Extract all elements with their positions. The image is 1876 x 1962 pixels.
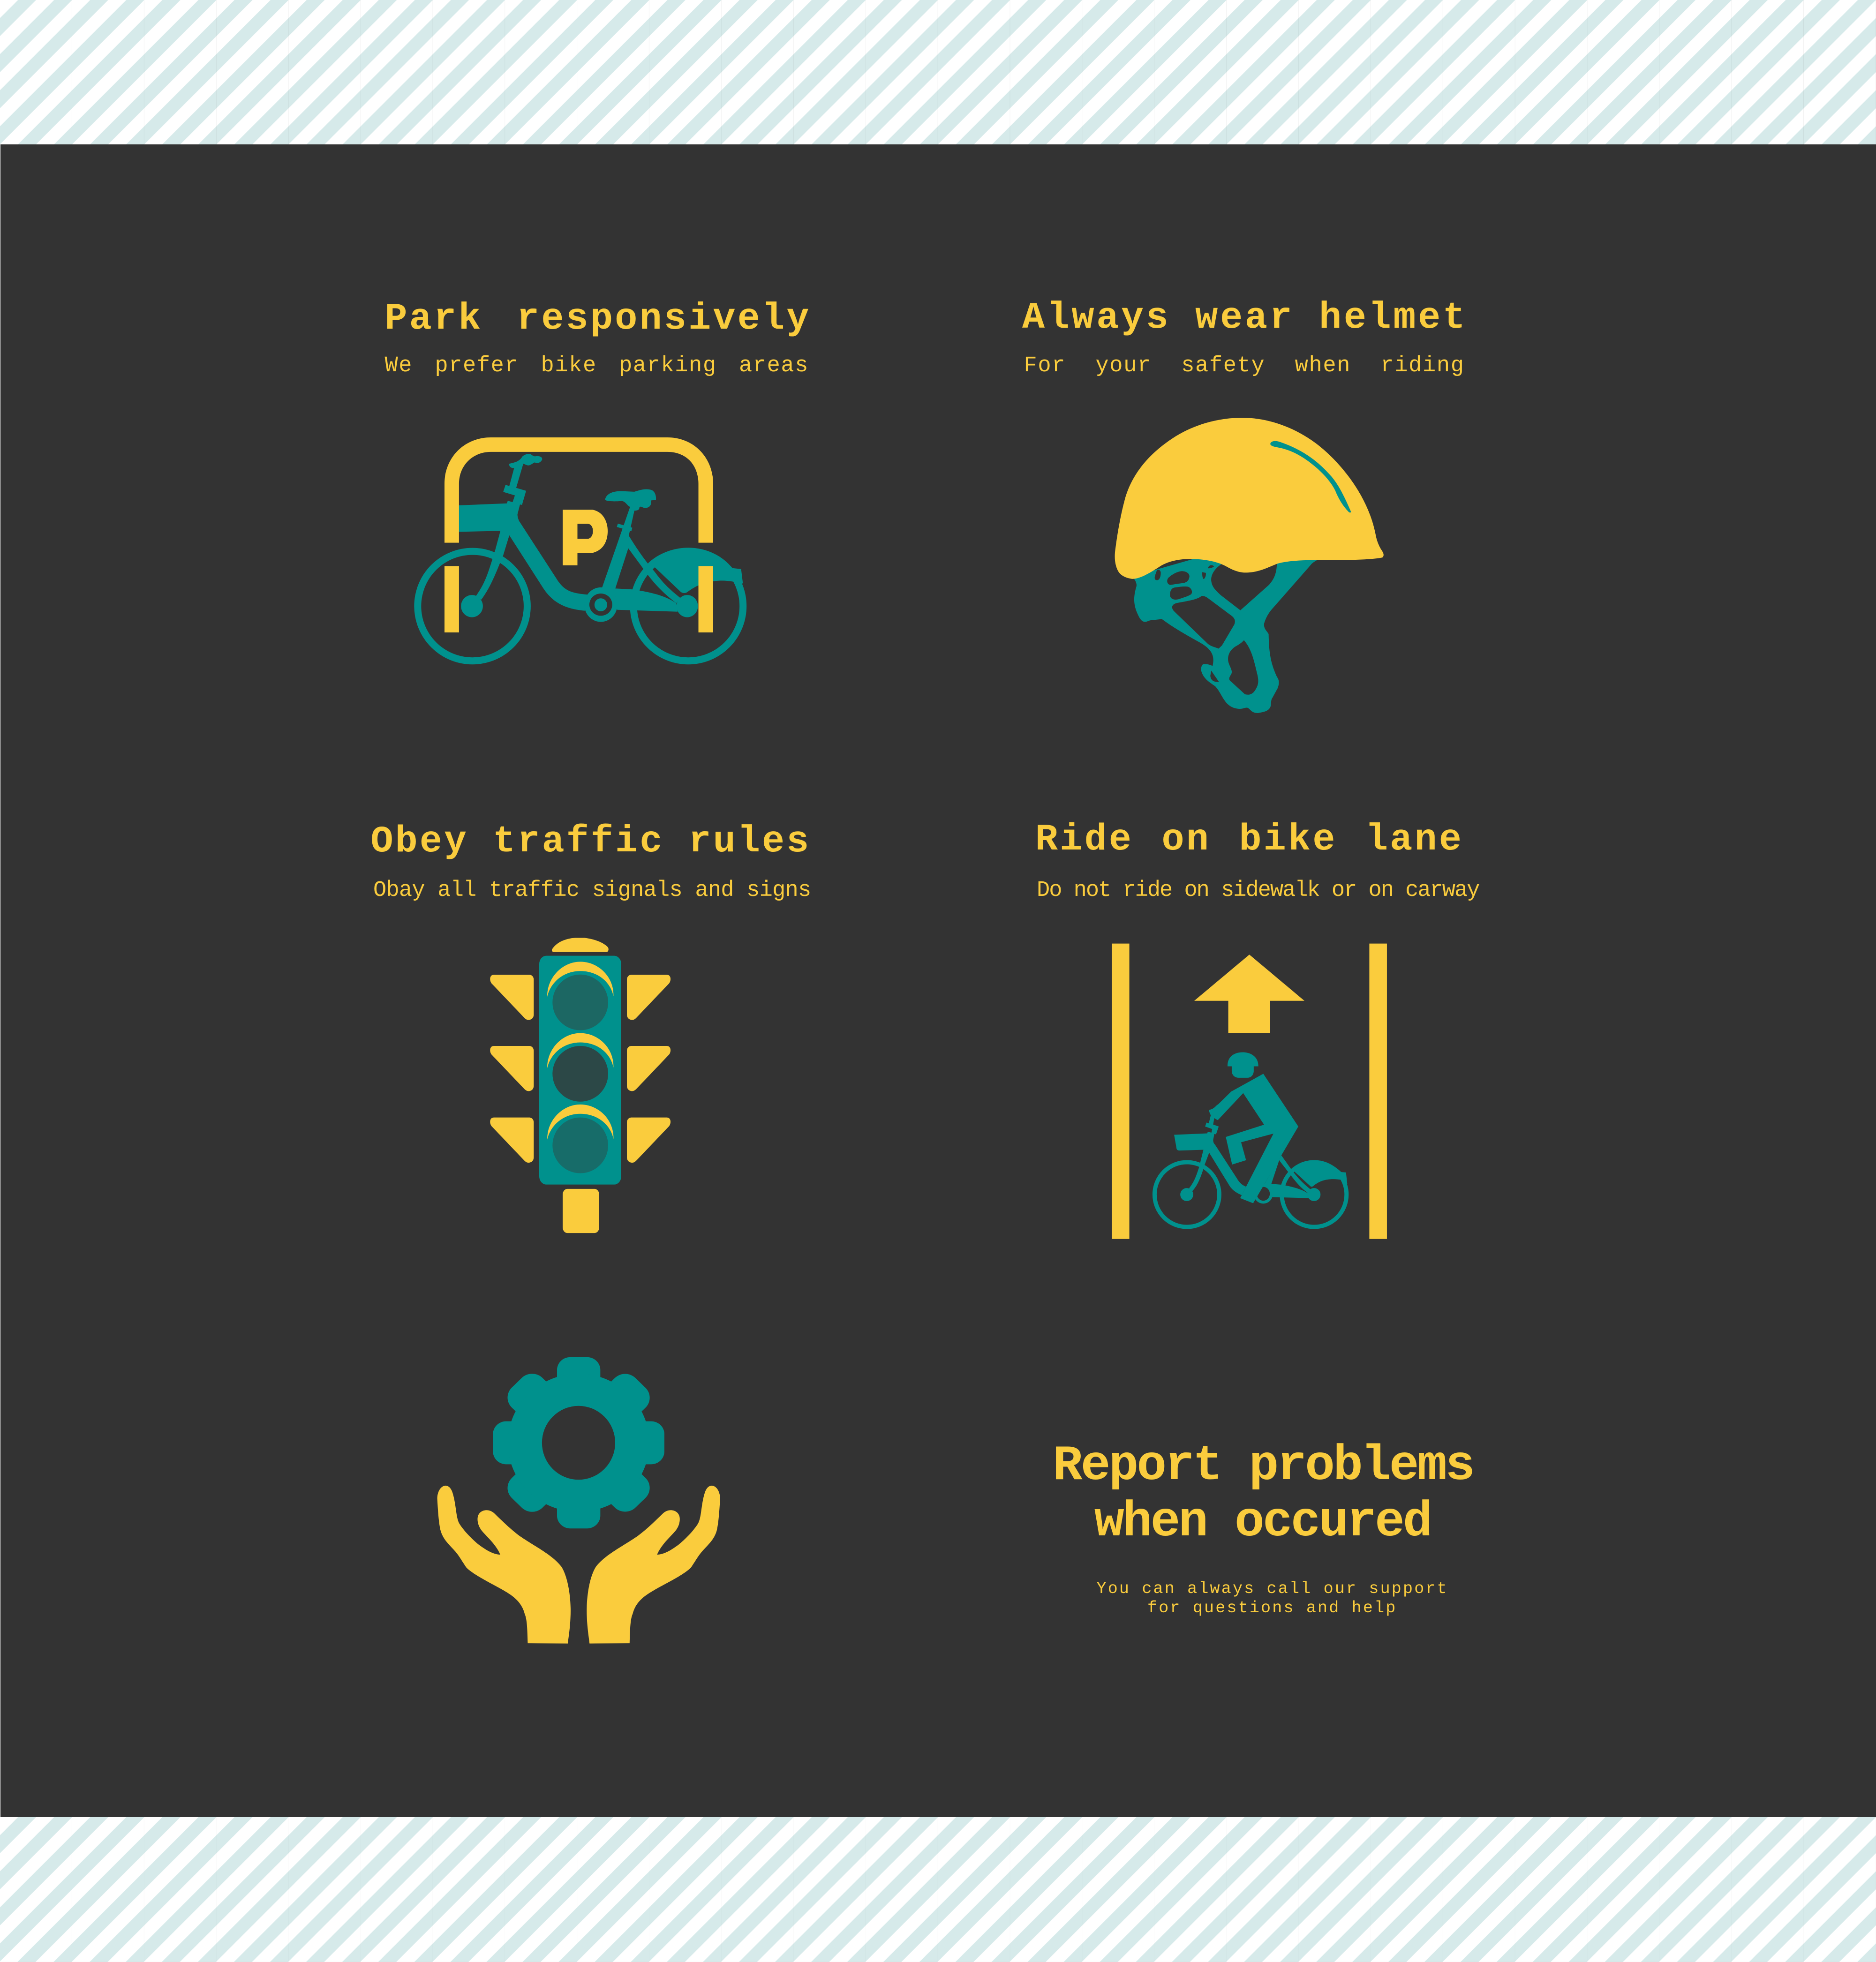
heading: park responsively: Park responsively <box>384 298 811 340</box>
heading: when occured: when occured <box>1094 1494 1431 1550</box>
icon: traffic light <box>490 938 671 1233</box>
icon: bike lane with cyclist <box>1112 944 1387 1239</box>
top striped band <box>0 0 1876 144</box>
icon: hands holding gear <box>437 1357 720 1644</box>
panel: obey traffic rules <box>370 820 811 1233</box>
subtext: questions and help: for questions and help <box>1147 1599 1397 1617</box>
panel: always wear helmet <box>1022 297 1468 713</box>
bottom striped band <box>0 1817 1876 1962</box>
heading: obey traffic rules: Obey traffic rules <box>370 820 811 863</box>
subtext: sidewalk: Do not ride on sidewalk or on carway <box>1037 878 1479 903</box>
heading: report problems: Report problems <box>1053 1438 1473 1494</box>
icon: parked bike <box>418 454 743 661</box>
heading: ride on bike lane: Ride on bike lane <box>1035 819 1463 861</box>
panel: ride on bike lane <box>1035 819 1479 1239</box>
subtext: signals: Obay all traffic signals and signs <box>373 878 811 903</box>
panel: report problems <box>437 1357 1473 1644</box>
heading: always wear helmet: Always wear helmet <box>1022 297 1468 339</box>
panel: park responsively <box>384 298 811 661</box>
subtext: safety: For your safety when riding <box>1024 353 1465 378</box>
subtext: call support: You can always call our support <box>1096 1579 1448 1598</box>
icon: helmet <box>1115 418 1384 713</box>
subtext: bike parking: We prefer bike parking areas <box>384 353 809 378</box>
icon: parking arch and P <box>445 437 713 632</box>
